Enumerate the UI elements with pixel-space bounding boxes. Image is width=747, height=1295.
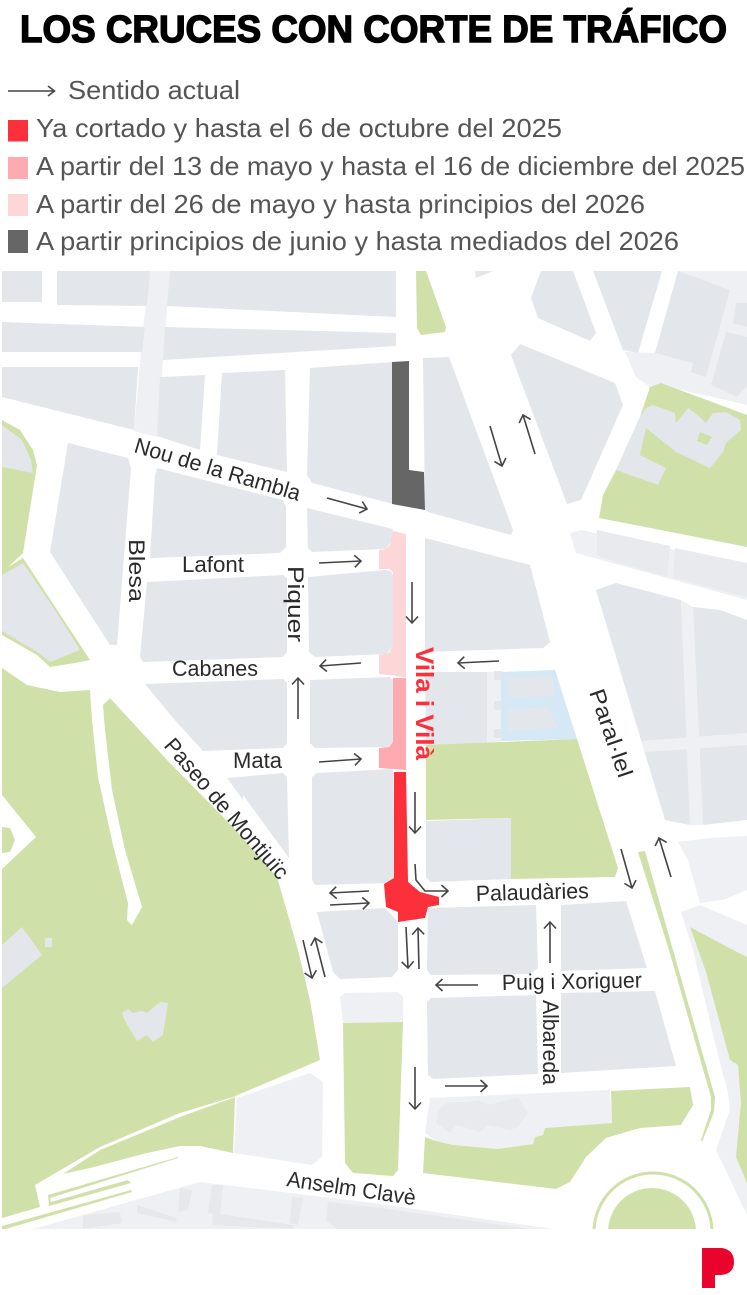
street labels bbox=[124, 433, 642, 1210]
map: park paths bbox=[2, 690, 142, 925]
street labels: Palaudàries bbox=[475, 878, 589, 906]
street labels: Cabanes bbox=[172, 656, 258, 681]
map: pale cross street over the eastern blocks bbox=[641, 733, 747, 752]
street labels: Paral·lel bbox=[584, 685, 638, 781]
traffic direction arrows bbox=[298, 415, 671, 1109]
road section: closing until December 2025 bbox=[379, 678, 406, 770]
street labels: Anselm Clavè bbox=[285, 1166, 418, 1210]
street labels: Nou de la Rambla bbox=[132, 433, 304, 506]
road section: closing early 2026 bbox=[379, 531, 406, 677]
road section: already closed bbox=[384, 772, 439, 922]
map bbox=[2, 270, 747, 1291]
logo bbox=[702, 1248, 734, 1288]
street labels: Mata bbox=[233, 748, 283, 773]
map: buildings by the water bbox=[494, 671, 558, 738]
map: city blocks bbox=[2, 271, 747, 1229]
street label: Vila i Vilà: Vila i Vilà bbox=[410, 647, 438, 760]
title: LOS CRUCES CON CORTE DE TRÁFICO bbox=[20, 7, 727, 51]
map: parks bbox=[2, 271, 747, 1291]
legend: from 13 May: A partir del 13 de mayo y hasta el 16 de diciembre del 2025 bbox=[36, 151, 745, 181]
legend: from 26 May: A partir del 26 de mayo y hasta principios del 2026 bbox=[36, 189, 645, 219]
map: water bbox=[501, 670, 577, 741]
legend: from June: A partir principios de junio y hasta mediados del 2026 bbox=[36, 226, 679, 256]
street labels: Paseo de Montjuïc bbox=[159, 733, 294, 884]
street labels: Piquer bbox=[283, 566, 308, 642]
street labels: Lafont bbox=[182, 552, 244, 577]
legend: already closed: Ya cortado y hasta el 6 de octubre del 2025 bbox=[36, 113, 562, 143]
legend: current direction: Sentido actual bbox=[68, 75, 240, 105]
road section: closing mid-2026 bbox=[392, 361, 425, 510]
map: pale areas and pedestrian streets bbox=[33, 270, 747, 1229]
street labels: Puig i Xoriguer bbox=[502, 968, 642, 995]
street labels: Albareda bbox=[538, 1000, 563, 1086]
map: details over the parks bbox=[2, 405, 741, 1042]
street labels: Blesa bbox=[124, 539, 149, 603]
legend bbox=[8, 75, 745, 256]
